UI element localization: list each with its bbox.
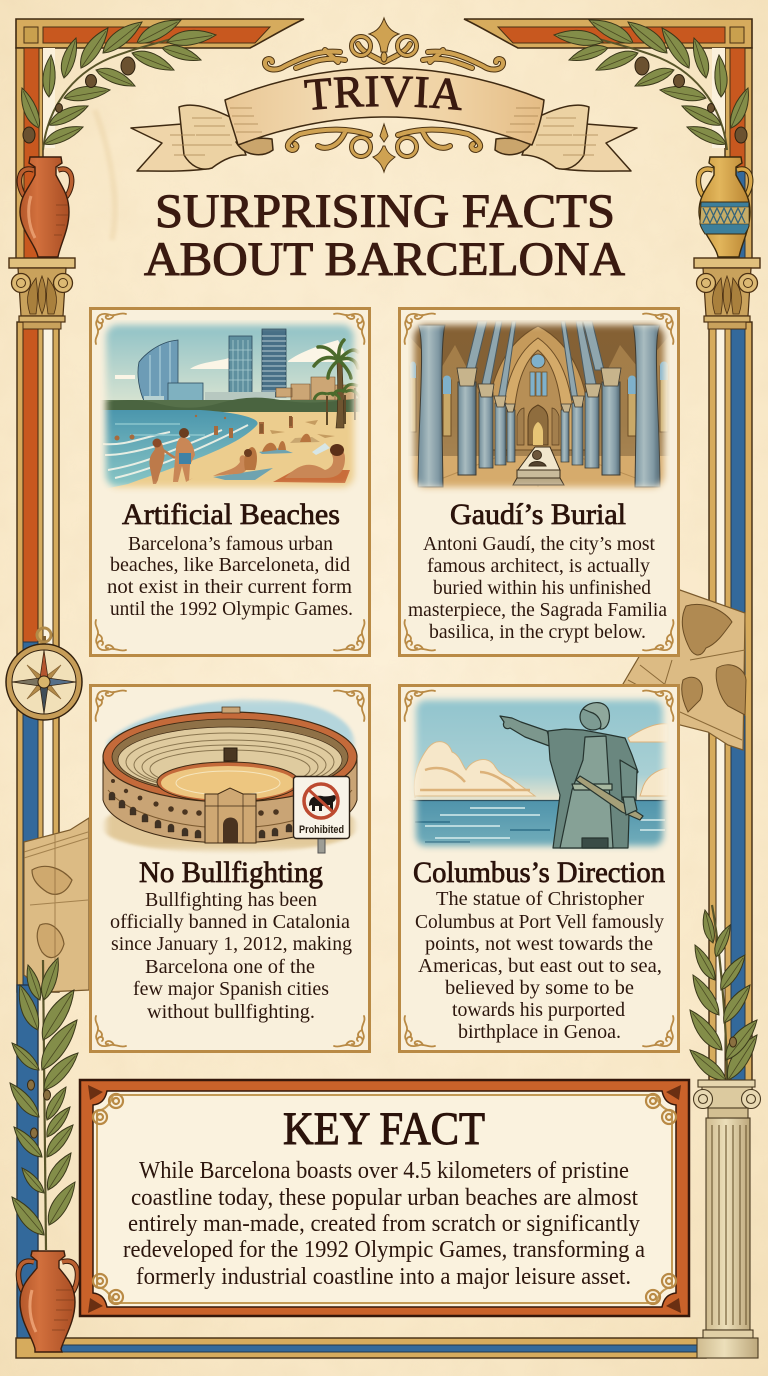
- body text: redeveloped for the 1992 Olympic Games, transforming a: [123, 1237, 645, 1263]
- body text: until the 1992 Olympic Games.: [110, 598, 353, 620]
- body text: masterpiece, the Sagrada Familia: [408, 599, 667, 621]
- beach couple: [149, 428, 195, 484]
- body text: points, not west towards the: [425, 933, 653, 955]
- heading: Columbus’s Direction: [413, 856, 665, 889]
- panel: key fact: [80, 1080, 689, 1316]
- body text: believed by some to be: [445, 977, 634, 999]
- illustration: beach with skyline: [100, 320, 360, 495]
- frame: right column: [709, 322, 752, 1092]
- corner scrolls: [88, 1085, 681, 1313]
- body text: few major Spanish cities: [133, 978, 329, 1000]
- body text: coastline today, these popular urban beaches are almost: [131, 1185, 638, 1211]
- panel: artificial beaches: [90, 308, 370, 656]
- body text: since January 1, 2012, making: [111, 933, 352, 955]
- banner title: TRIVIA: TRIVIA: [304, 76, 462, 110]
- body text: birthplace in Genoa.: [458, 1021, 621, 1043]
- body text: buried within his unfinished: [433, 577, 651, 599]
- olive branch: top right: [553, 13, 755, 150]
- body text: [110, 889, 352, 1023]
- vase: gold top right: [698, 157, 751, 257]
- body text: The statue of Christopher: [436, 888, 644, 910]
- olive branch: bottom right: [683, 905, 763, 1086]
- map: right: [623, 590, 746, 750]
- body text: without bullfighting.: [147, 1001, 315, 1023]
- prohibited sign: Prohibited: [299, 824, 344, 836]
- body text: [408, 533, 667, 643]
- body text: [415, 888, 664, 1043]
- illustration: Columbus statue: [408, 692, 670, 855]
- heading: KEY FACT: [283, 1103, 485, 1155]
- body text: beaches, like Barceloneta, did: [110, 554, 350, 576]
- frame: upper right column: [712, 48, 752, 260]
- olive branch: top left: [15, 13, 217, 150]
- main title: [144, 185, 625, 286]
- panel: Gaudi's burial: [400, 308, 678, 656]
- corner flourishes: [405, 313, 673, 651]
- body text: formerly industrial coastline into a major leisure asset.: [136, 1264, 631, 1290]
- body text: [107, 533, 353, 620]
- column capital: right: [694, 258, 760, 329]
- body text: entirely man-made, created from scratch or significantly: [128, 1211, 640, 1237]
- corner flourishes: [96, 690, 364, 1047]
- banner ribbon: [131, 68, 637, 171]
- stone column: bottom right: [694, 1080, 760, 1358]
- tomb: [513, 447, 564, 485]
- vase: terracotta top left: [19, 157, 72, 257]
- body text: towards his purported: [452, 999, 625, 1021]
- heading: Gaudí’s Burial: [450, 498, 626, 531]
- frame: upper left column: [16, 48, 55, 260]
- heading: Artificial Beaches: [122, 498, 340, 531]
- frame: top left corner: [16, 19, 304, 48]
- olive branch: bottom left: [4, 956, 83, 1250]
- body text: Americas, but east out to sea,: [418, 955, 662, 977]
- decorative scrolls above banner: [265, 18, 503, 69]
- decorative scrolls below banner: [288, 124, 480, 172]
- corner flourishes: [96, 313, 364, 651]
- compass: [6, 628, 82, 720]
- body text: famous architect, is actually: [427, 555, 650, 577]
- heading: No Bullfighting: [139, 856, 323, 889]
- body text: Barcelona’s famous urban: [128, 533, 333, 555]
- main title: ABOUT BARCELONA: [144, 233, 625, 286]
- body text: While Barcelona boasts over 4.5 kilometers of pristine: [139, 1158, 629, 1184]
- illustration: bullring: [100, 698, 360, 854]
- main title: SURPRISING FACTS: [155, 185, 615, 238]
- corner flourishes: [405, 690, 673, 1047]
- body text: Columbus at Port Vell famously: [415, 911, 664, 933]
- panel: no bullfighting: [90, 686, 370, 1052]
- palm trees: [314, 340, 360, 428]
- map: left: [24, 818, 89, 992]
- illustration: crypt interior: [408, 320, 670, 495]
- body text: Antoni Gaudí, the city’s most: [423, 533, 655, 555]
- towels and sunbathers: [213, 416, 350, 483]
- body text: [123, 1158, 645, 1290]
- frame: lower left column: [17, 322, 59, 1352]
- body text: Barcelona one of the: [145, 956, 315, 978]
- panel: Columbus's direction: [400, 686, 678, 1052]
- prohibited sign: [294, 776, 350, 853]
- body text: officially banned in Catalonia: [110, 911, 350, 933]
- body text: not exist in their current form: [107, 576, 352, 598]
- body text: basilica, in the crypt below.: [429, 621, 646, 643]
- vase: terracotta bottom left: [18, 1251, 78, 1352]
- column capital: left: [9, 258, 75, 329]
- body text: Bullfighting has been: [145, 889, 317, 911]
- frame: top right corner: [464, 19, 752, 48]
- frame: bottom band: [16, 1338, 706, 1358]
